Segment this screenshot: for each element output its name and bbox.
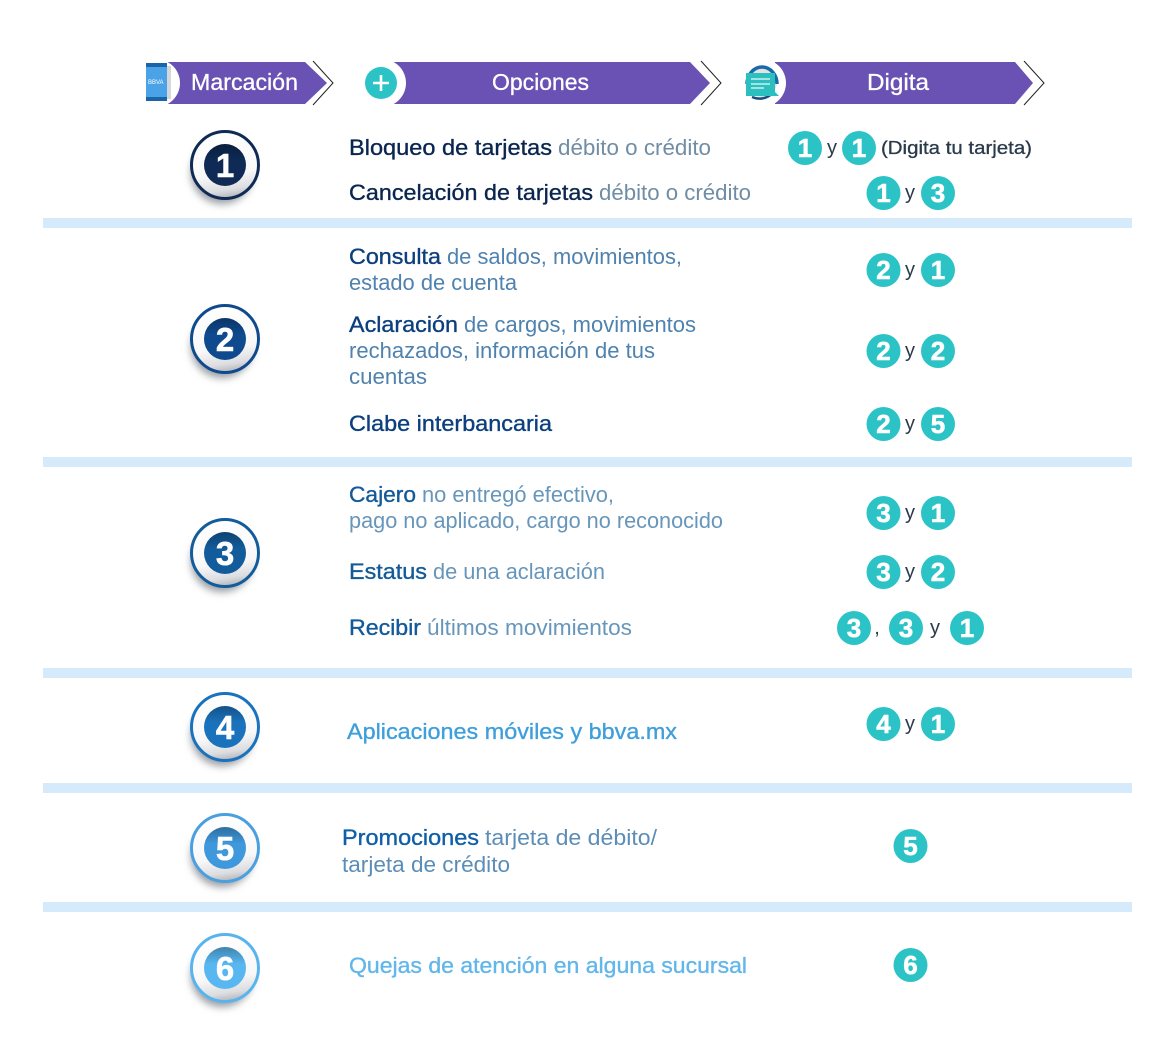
keys: 3 y 1 — [866, 496, 955, 530]
icon: phone — [146, 63, 171, 101]
medallion 6 — [191, 934, 258, 1007]
keys: 4 y 1: 4 — [876, 709, 891, 739]
row: aclaración: de cargos, movimientos — [464, 312, 696, 337]
medallion 6: 6 — [216, 950, 234, 987]
keys: 1 y 3: 3 — [931, 178, 945, 208]
row: bloqueo de tarjetas: débito o crédito — [558, 135, 711, 160]
header: Marcación: Marcación — [191, 69, 298, 95]
keys: 6 — [894, 948, 928, 982]
keys: 1 y 3: y — [905, 182, 915, 204]
keys: 1 y 1: y — [827, 137, 837, 159]
keys: 3, 3 y 1: , — [874, 617, 880, 639]
keys: 3 y 1: 1 — [931, 498, 945, 528]
keys: 2 y 2 — [866, 334, 955, 368]
row: quejas: Quejas de atención en alguna sucursal — [349, 953, 747, 978]
keys: 3, 3 y 1 — [837, 611, 984, 645]
row: bloqueo de tarjetas — [349, 135, 711, 160]
keys: 3 y 2 — [866, 555, 955, 589]
row: consulta — [349, 244, 682, 295]
medallion 2 — [191, 306, 258, 378]
keys: 4 y 1: y — [905, 713, 915, 735]
keys: 4 y 1 — [866, 707, 955, 741]
keys: 2 y 2: 2 — [931, 336, 945, 366]
icon: headset chat — [746, 67, 779, 99]
keys: 2 y 1 — [866, 253, 955, 287]
row: promociones: tarjeta de crédito — [342, 852, 510, 877]
icon: phone: BBVA — [148, 80, 164, 86]
keys: 1 y 1: 1 — [798, 133, 812, 163]
keys: 1 y 1: 1 — [852, 133, 866, 163]
header: Opciones: Opciones — [492, 69, 589, 95]
row: promociones: tarjeta de débito/ — [485, 825, 658, 850]
header: Digita: Digita — [867, 69, 929, 95]
medallion 3: 3 — [216, 535, 234, 572]
keys: 6: 6 — [903, 950, 918, 980]
keys: 2 y 2: y — [905, 340, 915, 362]
row: cajero — [349, 482, 723, 533]
medallion 4: 4 — [216, 709, 235, 746]
row: recibir: Recibir — [349, 615, 421, 640]
row: clabe interbancaria: Clabe interbancaria — [349, 411, 553, 436]
row: promociones — [342, 825, 658, 877]
keys: 3 y 2: y — [905, 561, 915, 583]
header: Opciones — [358, 59, 721, 107]
row: promociones: Promociones — [342, 825, 479, 850]
header: Digita — [738, 59, 1044, 107]
row: consulta: Consulta — [349, 244, 442, 269]
row: consulta: de saldos, movimientos, — [447, 244, 682, 269]
keys: 1 y 3: 1 — [876, 178, 891, 208]
row: cancelación de tarjetas: débito o crédito — [599, 180, 751, 205]
keys: 2 y 5: 5 — [931, 409, 945, 439]
row: cajero: pago no aplicado, cargo no reconocido — [349, 508, 723, 533]
icon: plus — [365, 67, 397, 99]
keys: 2 y 5 — [866, 407, 955, 441]
keys: 1 y 1: (Digita tu tarjeta) — [881, 138, 1032, 158]
row: cajero: Cajero — [349, 482, 416, 507]
row: recibir: últimos movimientos — [427, 615, 632, 640]
keys: 3 y 2: 3 — [876, 557, 891, 587]
keys: 5: 5 — [903, 831, 918, 861]
keys: 3, 3 y 1: 3 — [847, 613, 861, 643]
keys: 2 y 1: 2 — [876, 255, 891, 285]
keys: 3, 3 y 1: 1 — [960, 613, 974, 643]
row: cancelación de tarjetas: Cancelación de tarjetas — [349, 180, 593, 205]
keys: 2 y 1: y — [905, 259, 915, 281]
row: aclaración — [349, 312, 696, 389]
keys: 3 y 1: 3 — [876, 498, 891, 528]
row: estatus: de una aclaración — [433, 559, 605, 584]
keys: 2 y 5: 2 — [876, 409, 891, 439]
medallion 5 — [191, 814, 258, 887]
row: aclaración: rechazados, información de tus — [349, 338, 655, 363]
keys: 3 y 2: 2 — [931, 557, 945, 587]
keys: 2 y 2: 2 — [876, 336, 891, 366]
row: bloqueo de tarjetas: Bloqueo de tarjetas — [349, 135, 552, 160]
medallion 5: 5 — [216, 830, 234, 867]
keys: 2 y 5: y — [905, 413, 915, 435]
header: Marcación — [132, 59, 333, 107]
row: aclaración: cuentas — [349, 364, 427, 389]
row: aplicaciones móviles: Aplicaciones móviles y bbva.mx — [347, 719, 677, 744]
keys: 3, 3 y 1: y — [930, 617, 940, 639]
row: estatus — [349, 559, 605, 584]
keys: 5 — [894, 829, 928, 863]
row: consulta: estado de cuenta — [349, 270, 518, 295]
keys: 1 y 1 — [788, 131, 1032, 165]
keys: 1 y 3 — [866, 176, 955, 210]
keys: 4 y 1: 1 — [931, 709, 945, 739]
row: estatus: Estatus — [349, 559, 427, 584]
keys: 2 y 1: 1 — [931, 255, 945, 285]
medallion 1: 1 — [216, 147, 234, 184]
medallion 2: 2 — [216, 321, 234, 358]
medallion 4 — [191, 694, 258, 766]
medallion 3 — [191, 520, 258, 592]
keys: 3, 3 y 1: 3 — [899, 613, 913, 643]
row: cajero: no entregó efectivo, — [422, 482, 614, 507]
row: aclaración: Aclaración — [349, 312, 458, 337]
keys: 3 y 1: y — [905, 502, 915, 524]
medallion 1 — [191, 132, 258, 204]
row: cancelación de tarjetas — [349, 180, 751, 205]
